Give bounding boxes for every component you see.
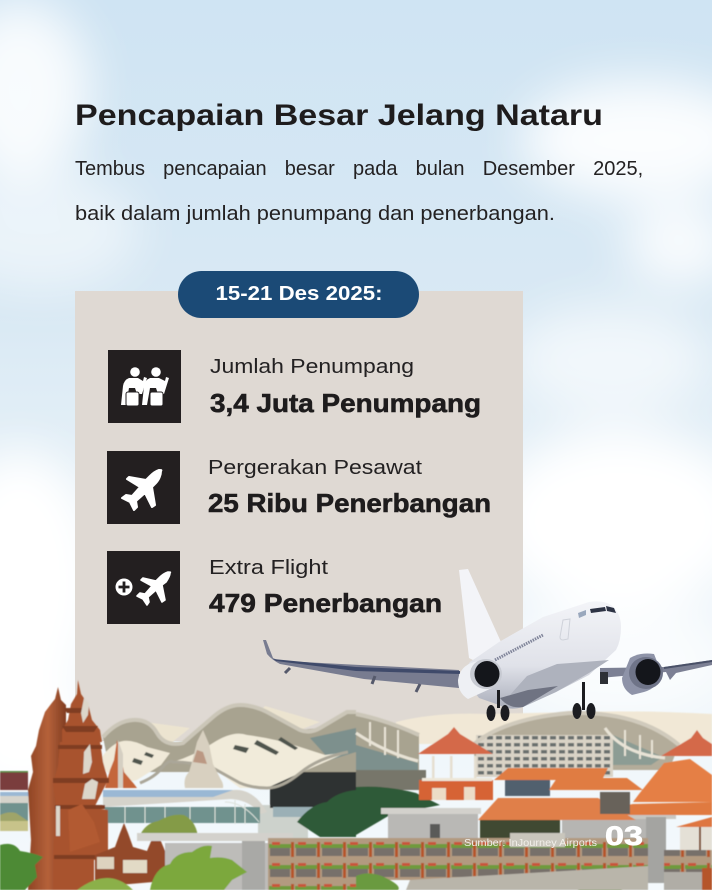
intro text: baik dalam jumlah penumpang dan penerbangan. bbox=[75, 203, 555, 225]
date pill: 15-21 Des 2025: bbox=[216, 283, 382, 305]
panel: statistics background bbox=[75, 291, 523, 741]
value: 3,4 Juta Penumpang bbox=[210, 388, 481, 418]
fuselage bbox=[461, 601, 621, 709]
stat: extra flight bbox=[107, 551, 442, 624]
far wing bbox=[263, 640, 459, 688]
intro text bbox=[75, 158, 643, 225]
cockpit windows bbox=[590, 606, 616, 613]
bright foreground foliage bbox=[0, 819, 628, 890]
icon: airplane bbox=[107, 451, 180, 524]
source credit: Sumber: InJourney Airports bbox=[464, 837, 597, 849]
engine right bbox=[622, 654, 663, 695]
page number: 03 bbox=[605, 821, 643, 851]
trees bbox=[0, 787, 440, 837]
glass walkway bbox=[0, 771, 323, 824]
label: Pergerakan Pesawat bbox=[208, 457, 423, 479]
low wall and small shrines bbox=[95, 823, 165, 887]
terraced garden planters bbox=[268, 833, 712, 890]
label: Extra Flight bbox=[209, 557, 329, 579]
engine left bbox=[458, 659, 502, 699]
label: Jumlah Penumpang bbox=[210, 356, 414, 378]
landing gear bbox=[486, 672, 608, 721]
ornamental stone gates bbox=[105, 730, 223, 788]
value: 25 Ribu Penerbangan bbox=[208, 488, 491, 518]
tail fin bbox=[459, 569, 501, 660]
value: 479 Penerbangan bbox=[209, 588, 442, 618]
airplane bbox=[263, 569, 712, 721]
stat: aircraft movements bbox=[107, 451, 491, 524]
lower cream roofs bbox=[98, 741, 170, 783]
intro text: Tembus pencapaian besar pada bulan Desember 2025, bbox=[75, 158, 643, 180]
icon: seated passengers bbox=[108, 350, 181, 423]
rear cream roofs bbox=[396, 711, 712, 744]
gray service buildings bbox=[137, 808, 676, 890]
soffit and dark interior bbox=[103, 705, 356, 772]
orange roofed pavilions bbox=[418, 727, 712, 851]
airport scene bbox=[0, 680, 712, 890]
title: Pencapaian Besar Jelang Nataru bbox=[75, 99, 603, 132]
terminal building bbox=[98, 705, 712, 840]
icon: plus airplane bbox=[107, 551, 180, 624]
Balinese temple towers bbox=[28, 680, 165, 890]
date pill bbox=[178, 271, 419, 318]
right hall bbox=[473, 713, 679, 770]
wave roof bbox=[103, 705, 356, 744]
stat: passengers bbox=[108, 350, 481, 423]
